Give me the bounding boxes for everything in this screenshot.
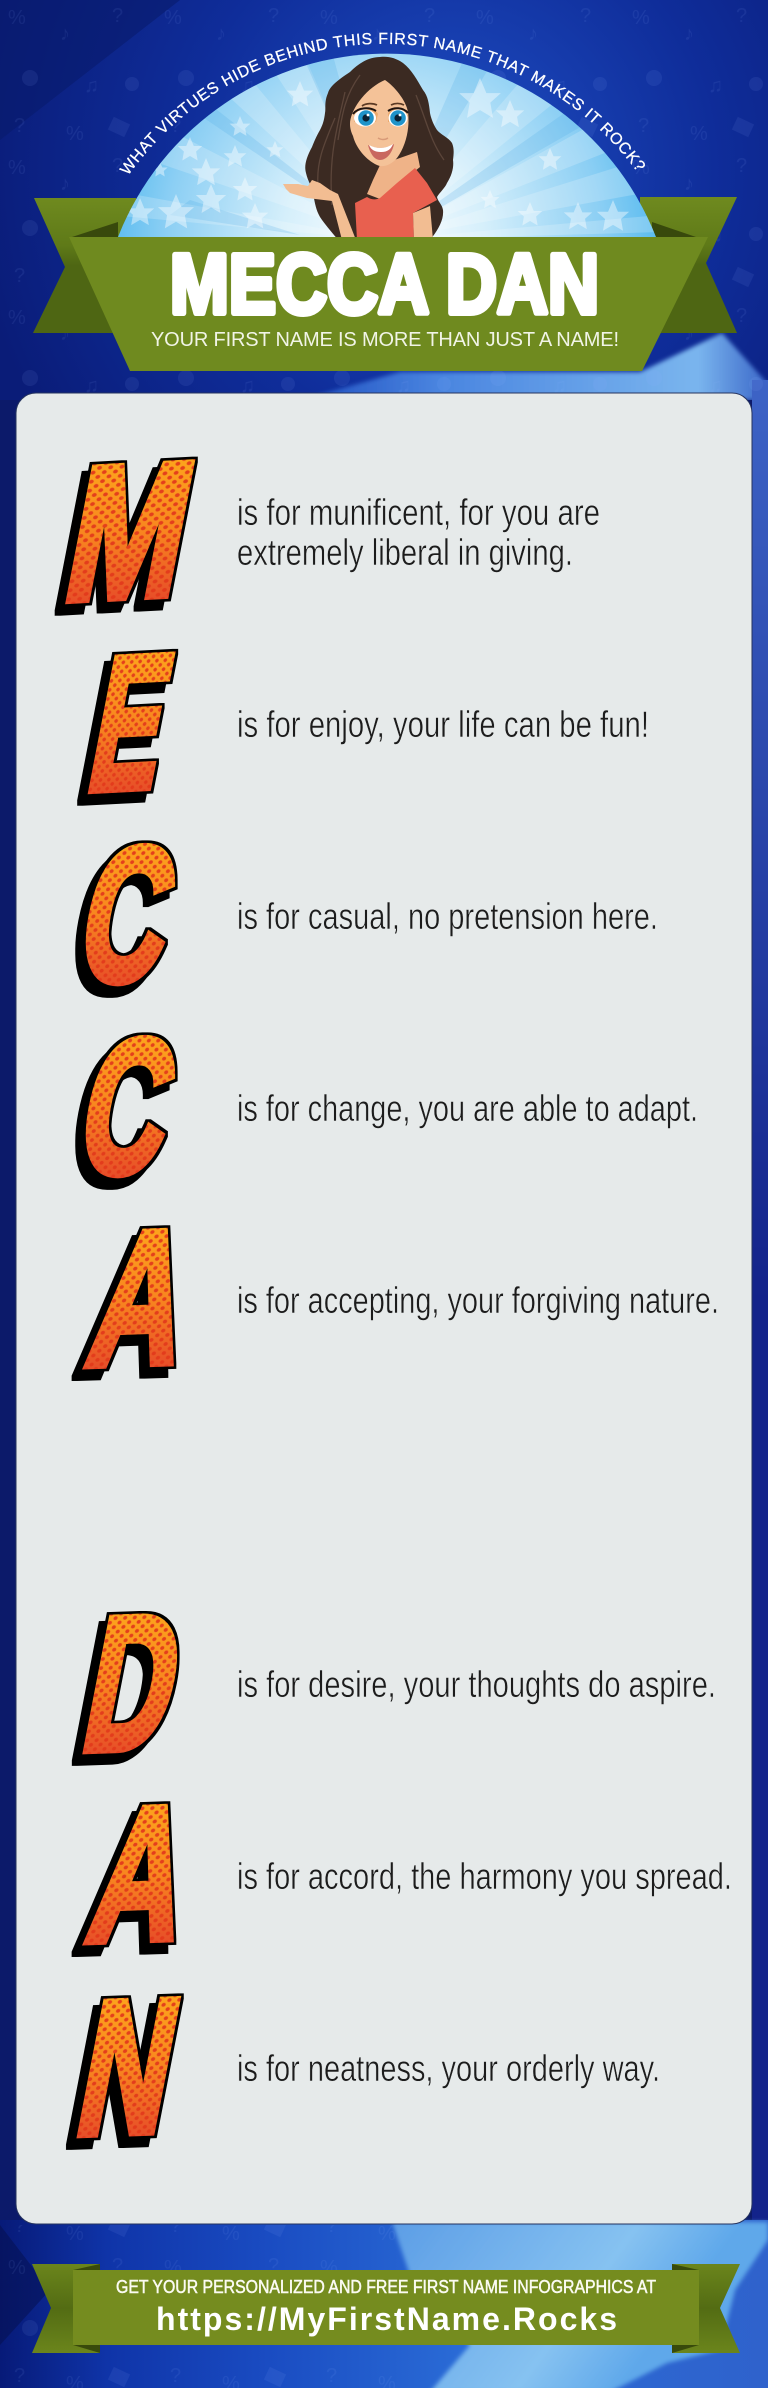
footer line one: GET YOUR PERSONALIZED AND FREE FIRST NAME INFOGRAPHICS AT [116, 2277, 656, 2297]
letter C: C [66, 808, 191, 1020]
letter A: A [76, 1767, 207, 1982]
hair [305, 57, 454, 240]
line M: is for munificent, for you are [237, 492, 600, 533]
line E: is for enjoy, your life can be fun! [237, 704, 649, 745]
letter E: E [76, 614, 187, 830]
shirt [355, 168, 437, 240]
letter D: D [70, 1577, 197, 1791]
line M [237, 492, 600, 573]
face [350, 80, 409, 166]
smile [368, 144, 394, 160]
curved tagline: WHAT VIRTUES HIDE BEHIND THIS FIRST NAME THAT MAKES IT ROCK? [118, 32, 645, 174]
subtitle: YOUR FIRST NAME IS MORE THAN JUST A NAME! [151, 329, 619, 351]
line C: is for casual, no pretension here. [237, 896, 658, 937]
top ribbon main [69, 237, 708, 371]
letter A: A [76, 1191, 207, 1406]
sunburst arch [118, 54, 656, 237]
footer ribbon [32, 2264, 740, 2353]
letter N: N [64, 1960, 194, 2175]
title: MECCA DAN [170, 237, 599, 331]
line M: extremely liberal in giving. [237, 532, 573, 573]
line N: is for neatness, your orderly way. [237, 2048, 660, 2089]
top ribbon tails [33, 197, 737, 333]
letter M: M [52, 422, 208, 641]
letter C: C [66, 1000, 191, 1212]
right arm [413, 206, 433, 240]
neck [367, 152, 420, 199]
eyes [353, 104, 408, 140]
left arm and hand [283, 180, 356, 240]
main panel [16, 393, 752, 2224]
character illustration [283, 57, 454, 240]
footer url: https://MyFirstName.Rocks [156, 2301, 617, 2337]
